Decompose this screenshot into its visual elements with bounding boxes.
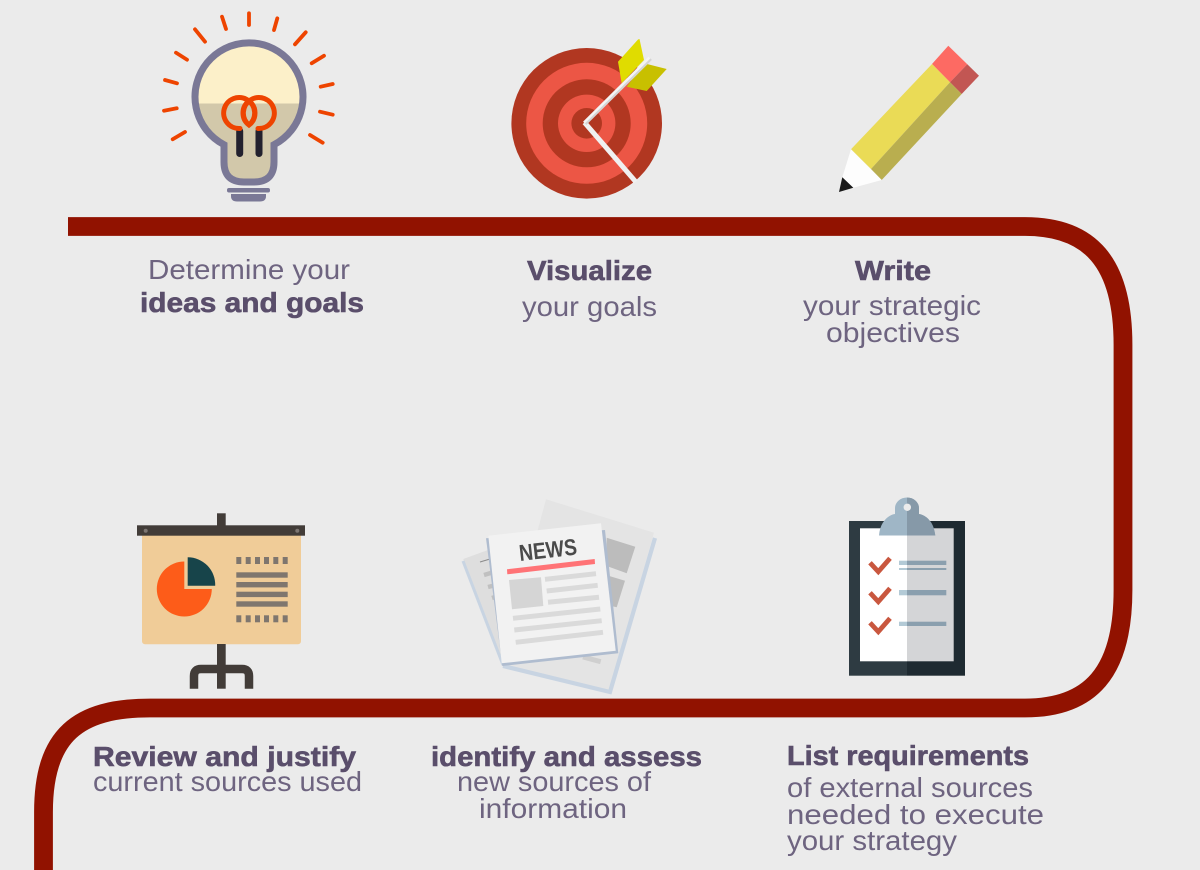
icon: pencil <box>839 46 979 192</box>
text: step 6: needed to execute <box>787 799 1044 830</box>
text: step 1: Determine your <box>148 254 350 285</box>
text: step 5 <box>431 741 702 824</box>
icon: presentation board <box>137 513 305 689</box>
text: step 3: Write <box>855 255 931 286</box>
icon: target with arrow <box>511 39 667 199</box>
icon: newspapers: NEWS <box>518 534 578 566</box>
text: step 5: new sources of <box>457 766 651 797</box>
text: step 3: objectives <box>826 317 960 348</box>
text: step 6: your strategy <box>787 825 957 856</box>
text: step 2: Visualize <box>527 255 652 286</box>
text: step 6 <box>787 740 1044 856</box>
icon: clipboard checklist <box>849 498 965 676</box>
text: step 3: your strategic <box>803 290 981 321</box>
text: step 5: information <box>479 793 627 824</box>
text: step 4: Review and justify <box>93 741 356 772</box>
text: step 1: ideas and goals <box>140 287 364 318</box>
text: step 2: your goals <box>522 291 657 322</box>
text: step 1 <box>140 254 364 318</box>
text: step 3 <box>803 255 981 348</box>
icon: light bulb <box>164 13 333 201</box>
text: step 6: of external sources <box>787 772 1033 803</box>
icon: newspapers <box>463 499 655 692</box>
text: step 6: List requirements <box>787 740 1029 771</box>
winding road path <box>44 226 1123 870</box>
text: step 2 <box>522 255 657 322</box>
text: step 4 <box>93 741 362 797</box>
text: step 4: current sources used <box>93 766 362 797</box>
text: step 5: identify and assess <box>431 741 702 772</box>
